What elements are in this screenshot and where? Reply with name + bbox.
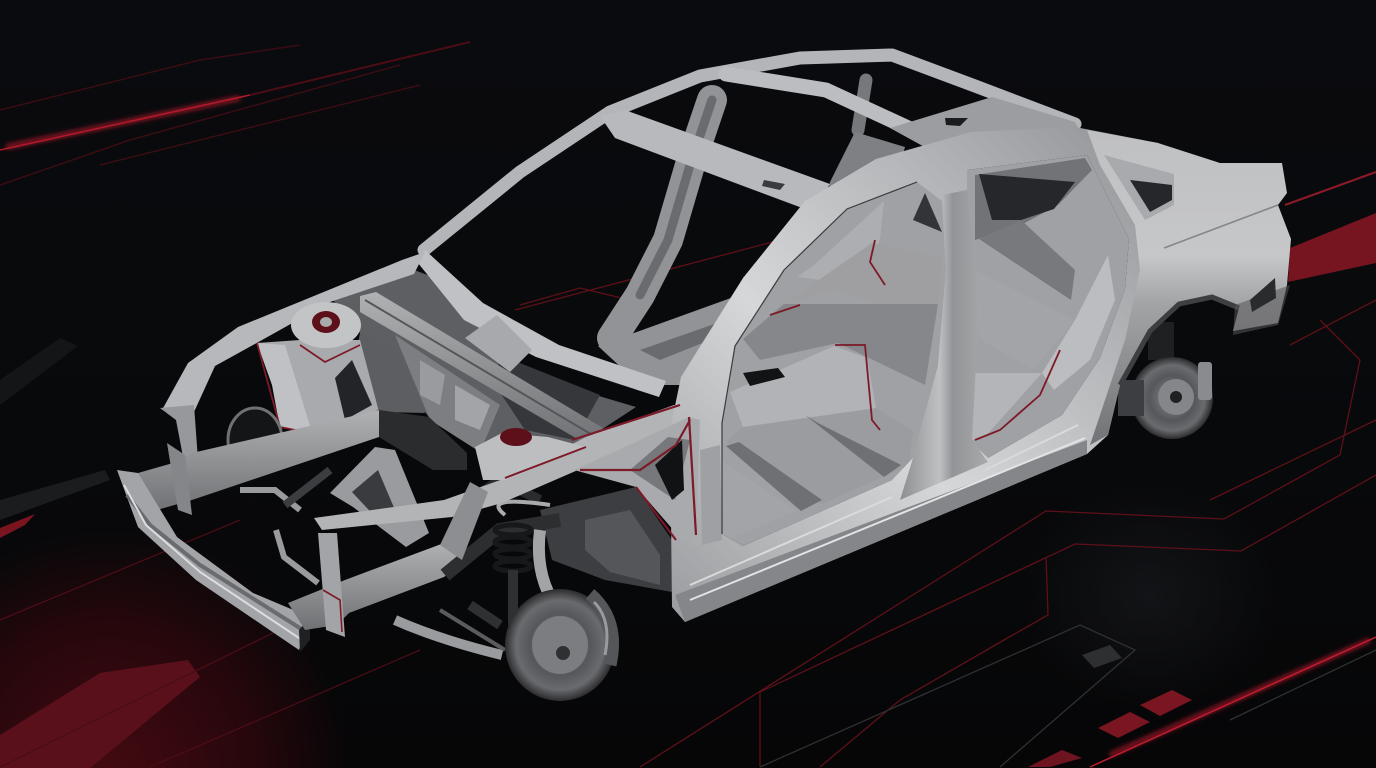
- wheel arch shadow: [1120, 297, 1239, 385]
- glowing line bottom right: [1110, 640, 1370, 755]
- cowl arc: [418, 250, 666, 397]
- rear wheel and brake: [1118, 322, 1213, 439]
- near front rail: [314, 405, 700, 530]
- near upright bracket: [318, 533, 345, 637]
- mid floor: [743, 304, 938, 385]
- door opening edge: [722, 182, 917, 534]
- rear seat wall: [975, 270, 1075, 369]
- seat back wall: [784, 243, 942, 308]
- rear quarter panel: [1087, 130, 1291, 445]
- weld seams in cabin: [770, 240, 1060, 440]
- near strut tower: [475, 428, 586, 480]
- near front wheel and brake: [505, 589, 615, 701]
- far C panel: [818, 132, 905, 258]
- front cross member: [726, 442, 822, 511]
- far B pillar: [612, 100, 712, 338]
- parcel shelf: [890, 97, 1090, 150]
- quarter window: [1104, 155, 1174, 220]
- rear lower section: [1233, 285, 1290, 335]
- second roof bow: [726, 74, 945, 145]
- bumper beam: [117, 470, 310, 652]
- sill highlight: [690, 438, 1085, 600]
- far C pillar: [858, 80, 866, 130]
- front suspension rear side: [228, 408, 429, 583]
- far panel in front door view: [797, 201, 884, 285]
- left drop bracket: [160, 405, 198, 462]
- left wheelhouse: [345, 333, 425, 413]
- dash tube: [360, 292, 603, 444]
- rear floor: [971, 373, 1042, 440]
- cabin floor base: [722, 155, 1129, 546]
- red panel lower left: [0, 660, 200, 768]
- red panel right: [1288, 213, 1376, 282]
- strut leg to lower rail: [440, 482, 488, 560]
- rear shelf and window view: [975, 158, 1092, 240]
- shoulder line: [1164, 205, 1278, 248]
- near wheelhouse: [540, 487, 672, 592]
- cowl bracket: [465, 315, 532, 372]
- rear lower opening: [1250, 278, 1276, 312]
- rear side panel: [1058, 170, 1120, 304]
- dark rail extension: [379, 410, 467, 470]
- far sill: [598, 282, 800, 385]
- interior floor and panels: [722, 155, 1129, 546]
- A pillar base gusset: [574, 417, 700, 540]
- front roof bow: [600, 110, 830, 212]
- coil spring: [495, 525, 531, 571]
- glowing line top left: [6, 98, 240, 147]
- red glow lower left: [0, 528, 350, 768]
- left upper fender arc: [162, 252, 425, 412]
- car structure: [117, 55, 1291, 701]
- rear floor pan: [979, 220, 1075, 300]
- near suspension arms and strut: [395, 480, 560, 655]
- floor reflection: [1020, 480, 1280, 710]
- firewall: [333, 270, 636, 453]
- left strut tower: [257, 302, 379, 437]
- left frame rail: [138, 410, 379, 512]
- left crash plate: [167, 443, 192, 515]
- front floor: [722, 461, 797, 538]
- front lower floor: [726, 408, 913, 504]
- rear wheelhouse: [1042, 255, 1115, 390]
- circuit traces: [515, 240, 1376, 767]
- far rear door glimpse: [913, 193, 942, 232]
- tunnel: [730, 346, 876, 427]
- seat cross member: [805, 415, 901, 477]
- sill lower shadow: [675, 440, 1087, 622]
- B pillar: [900, 190, 988, 500]
- far roof rail: [424, 55, 1075, 250]
- near lower frame rail: [288, 543, 467, 630]
- far side roof rail and pillars: [424, 55, 1075, 338]
- near side body frame: [572, 127, 1190, 622]
- dim grey shapes at left: [0, 470, 110, 520]
- red blocks bottom right: [1028, 750, 1082, 767]
- outer side frame with door openings: [670, 127, 1190, 622]
